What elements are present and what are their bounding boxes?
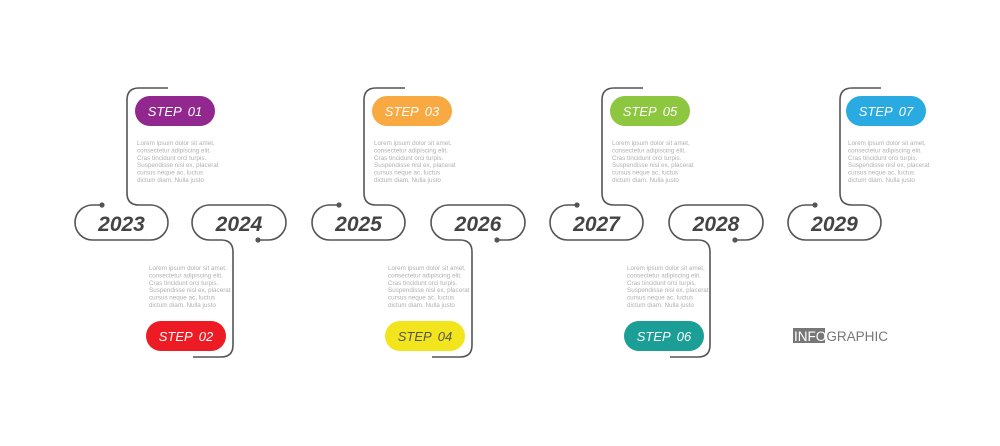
unit: 2029 step 07: Lorem ipsum dolor sit amet, (848, 140, 926, 147)
unit: 2025 step 03: STEP 03 (385, 104, 440, 119)
unit: 2023 step 01: Suspendisse nisl ex, placerat (137, 162, 219, 169)
unit: 2029 step 07: cursus neque ac, luctus (848, 170, 914, 177)
unit: 2028 step 06: Suspendisse nisl ex, placerat (627, 287, 709, 294)
unit: 2027 step 05: consectetur adipiscing elit. (612, 147, 686, 154)
unit: 2027 step 05: Suspendisse nisl ex, placerat (612, 162, 694, 169)
unit: 2027 step 05: 2027 (572, 213, 621, 236)
unit: 2025 step 03: cursus neque ac, luctus (374, 170, 440, 177)
unit: 2028 step 06: 2028 (692, 213, 740, 236)
unit: 2028 step 06: consectetur adipiscing elit. (627, 272, 701, 279)
unit: 2024 step 02: 2024 (215, 213, 263, 236)
logo: infographic: INFOGRAPHIC (794, 329, 888, 344)
unit: 2025 step 03: dictum diam. Nulla justo (374, 177, 441, 184)
unit: 2024 step 02: Lorem ipsum dolor sit amet, (149, 265, 227, 272)
unit: 2029 step 07: dictum diam. Nulla justo (848, 177, 915, 184)
unit: 2024 step 02: cursus neque ac, luctus (149, 295, 215, 302)
unit: 2023 step 01: consectetur adipiscing elit. (137, 147, 211, 154)
unit: 2027 step 05 (550, 88, 694, 240)
unit: 2026 step 04: STEP 04 (398, 329, 452, 344)
unit: 2027 step 05: Cras tincidunt orci turpis. (612, 155, 682, 162)
unit: 2029 step 07: STEP 07 (859, 104, 914, 119)
unit: 2024 step 02: Suspendisse nisl ex, placerat (149, 287, 231, 294)
unit: 2027 step 05: dictum diam. Nulla justo (612, 177, 679, 184)
unit: 2025 step 03: Lorem ipsum dolor sit amet, (374, 140, 452, 147)
unit: 2024 step 02: consectetur adipiscing elit. (149, 272, 223, 279)
unit: 2028 step 06: STEP 06 (637, 329, 692, 344)
unit: 2024 step 02: STEP 02 (159, 329, 214, 344)
unit: 2026 step 04 (385, 205, 525, 357)
unit: 2023 step 01 (75, 88, 219, 240)
unit: 2023 step 01: Lorem ipsum dolor sit amet, (137, 140, 215, 147)
unit: 2025 step 03 (312, 88, 456, 240)
unit: 2023 step 01: Cras tincidunt orci turpis. (137, 155, 207, 162)
unit: 2026 step 04: consectetur adipiscing elit. (388, 272, 462, 279)
unit: 2023 step 01: dictum diam. Nulla justo (137, 177, 204, 184)
unit: 2029 step 07: Cras tincidunt orci turpis. (848, 155, 918, 162)
unit: 2027 step 05: STEP 05 (623, 104, 678, 119)
unit: 2026 step 04: cursus neque ac, luctus (388, 295, 454, 302)
unit: 2024 step 02: dictum diam. Nulla justo (149, 302, 216, 309)
unit: 2027 step 05: Lorem ipsum dolor sit amet, (612, 140, 690, 147)
unit: 2026 step 04: Cras tincidunt orci turpis. (388, 280, 458, 287)
unit: 2029 step 07 (788, 88, 930, 240)
unit: 2023 step 01: 2023 (97, 213, 145, 236)
unit: 2029 step 07: 2029 (810, 213, 858, 236)
unit: 2026 step 04: Lorem ipsum dolor sit amet, (388, 265, 466, 272)
unit: 2027 step 05: cursus neque ac, luctus (612, 170, 678, 177)
unit: 2023 step 01: cursus neque ac, luctus (137, 170, 203, 177)
unit: 2024 step 02 (146, 205, 286, 357)
unit: 2028 step 06: dictum diam. Nulla justo (627, 302, 694, 309)
unit: 2026 step 04: Suspendisse nisl ex, placerat (388, 287, 470, 294)
unit: 2028 step 06: Lorem ipsum dolor sit amet, (627, 265, 705, 272)
unit: 2026 step 04: 2026 (454, 213, 502, 236)
unit: 2025 step 03: Suspendisse nisl ex, placerat (374, 162, 456, 169)
unit: 2025 step 03: 2025 (334, 213, 382, 236)
unit: 2028 step 06: Cras tincidunt orci turpis. (627, 280, 697, 287)
unit: 2025 step 03: consectetur adipiscing elit. (374, 147, 448, 154)
unit: 2023 step 01: STEP 01 (148, 104, 202, 119)
unit: 2028 step 06 (624, 205, 763, 357)
unit: 2026 step 04: dictum diam. Nulla justo (388, 302, 455, 309)
unit: 2025 step 03: Cras tincidunt orci turpis. (374, 155, 444, 162)
unit: 2029 step 07: Suspendisse nisl ex, placerat (848, 162, 930, 169)
unit: 2029 step 07: consectetur adipiscing elit. (848, 147, 922, 154)
unit: 2028 step 06: cursus neque ac, luctus (627, 295, 693, 302)
unit: 2024 step 02: Cras tincidunt orci turpis. (149, 280, 219, 287)
